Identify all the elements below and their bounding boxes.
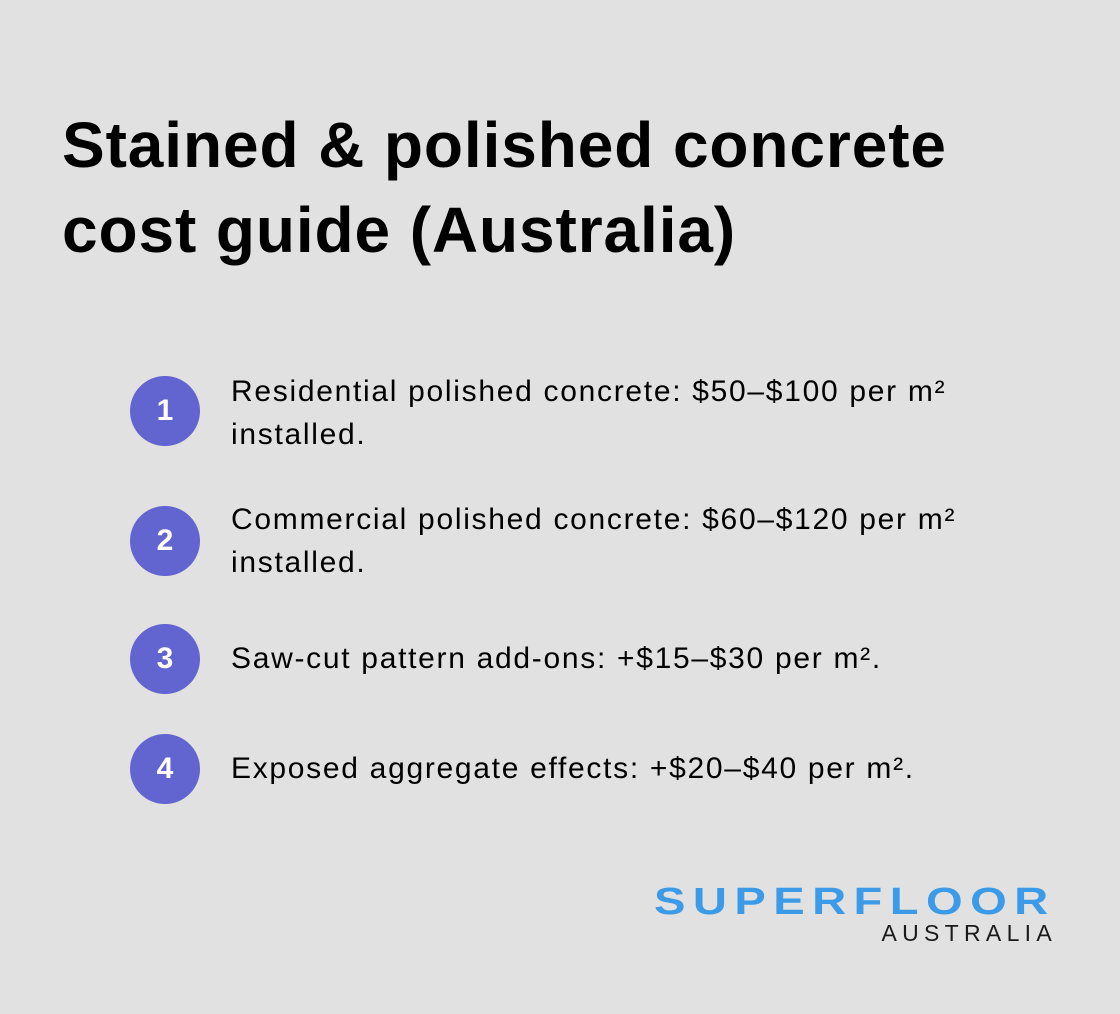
badge 3: 3 (157, 642, 173, 675)
logo: AUSTRALIA (881, 920, 1057, 946)
badge 4: 4 (157, 752, 173, 785)
badge 3 (130, 624, 200, 694)
text 3: Saw-cut pattern add-ons: +$15–$30 per m². (231, 642, 882, 675)
item 2 (130, 503, 956, 579)
title: Stained & polished concrete (62, 109, 947, 181)
logo: SUPERFLOOR (654, 881, 1056, 923)
badge 4 (130, 734, 200, 804)
text 2 (231, 503, 956, 579)
badge 1: 1 (157, 394, 173, 427)
title (62, 109, 947, 266)
text 1 (231, 375, 946, 451)
item 3 (130, 624, 882, 694)
item 4 (130, 734, 915, 804)
text 1: Residential polished concrete: $50–$100 per m² (231, 375, 946, 408)
text 2: installed. (231, 546, 366, 579)
item 1 (130, 375, 946, 451)
text 1: installed. (231, 418, 366, 451)
badge 2: 2 (157, 524, 173, 557)
text 2: Commercial polished concrete: $60–$120 per m² (231, 503, 956, 536)
logo (654, 881, 1057, 946)
badge 2 (130, 506, 200, 576)
title: cost guide (Australia) (62, 194, 736, 266)
text 4: Exposed aggregate effects: +$20–$40 per m². (231, 752, 915, 785)
badge 1 (130, 376, 200, 446)
